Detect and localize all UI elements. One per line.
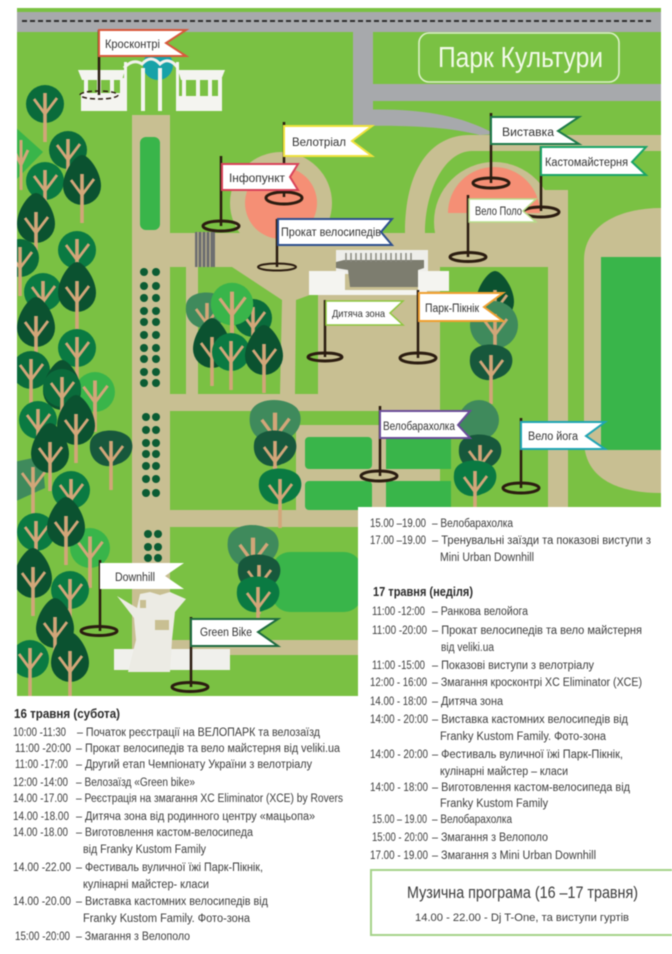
schedule: 17 May: 11:00 -15:00 — [372, 660, 425, 672]
flag: Кросконтрі — [80, 30, 186, 99]
flag: Кросконтрі: Кросконтрі — [105, 39, 160, 51]
flag: Green Bike — [172, 617, 278, 692]
schedule: 16 May: 11:00 -20:00 — [15, 743, 71, 755]
schedule: 17 May: – Змагання кросконтрі XC Eliminator (XCE) — [432, 677, 642, 689]
stairs — [195, 232, 215, 267]
flag: Велотріал — [266, 122, 372, 204]
tree cluster: central park — [186, 283, 283, 393]
white schedule panel — [358, 507, 672, 954]
schedule: 17 May: – Виготовлення кастом-велосипеда від — [432, 782, 630, 794]
schedule: 17 May: – Фестиваль вуличної їжі Парк-Пікнік, — [432, 749, 623, 761]
schedule: 16 May continued — [370, 518, 651, 564]
flag: Велобарахолка — [361, 406, 470, 481]
flag: Кастомайстерня: Кастомайстерня — [545, 157, 628, 169]
schedule: 17 May: – Змагання з Велополо — [432, 832, 548, 844]
tree cluster: east of plaza — [470, 271, 518, 404]
salmon flower beds — [245, 167, 540, 239]
schedule: 17 May: від veliki.ua — [441, 642, 495, 654]
schedule: 17 May: 14:00 - 20:00 — [370, 714, 428, 726]
music programme box: 14.00 - 22.00 - Dj T-One, та виступи гуртів — [415, 912, 629, 924]
schedule: 16 May: – Велозаїзд «Green bike» — [76, 777, 195, 789]
schedule: 17 May: 11:00 -12:00 — [372, 606, 425, 618]
heading: 17 травня (неділя): 17 травня (неділя) — [373, 584, 473, 599]
flag: Парк-Пікнік — [400, 290, 503, 363]
flag: Дитяча зона — [308, 300, 403, 361]
schedule: 16 May: – Початок реєстрації на ВЕЛОПАРК та велозаїзд — [77, 727, 320, 739]
schedule: 17 May: – Виставка кастомних велосипедів від — [432, 714, 628, 726]
schedule: 16 May continued: Mini Urban Downhill — [440, 552, 534, 564]
schedule: 16 May: 15:00 -20:00 — [15, 931, 70, 943]
flag: Green Bike: Green Bike — [200, 627, 252, 639]
schedule: 16 May: – Дитяча зона від родинного центру «мацьопа» — [76, 811, 315, 823]
schedule: 16 May: 14.00 -17.00 — [13, 793, 68, 805]
schedule: 16 May: 10:00 -11:30 — [13, 727, 66, 739]
schedule: 17 May: 14:00 - 18:00 — [370, 782, 428, 794]
schedule: 16 May: 14.00 -18.00 — [13, 811, 69, 823]
road network — [17, 12, 661, 135]
flag: Інфопункт — [203, 156, 298, 231]
schedule: 17 May: 12:00 - 16:00 — [370, 677, 427, 689]
flag: Кастомайстерня — [523, 146, 646, 217]
schedule: 16 May: – Реєстрація на змагання XC Eliminator (XCE) by Rovers — [76, 793, 343, 805]
tree belt along left edge — [16, 84, 134, 696]
schedule: 17 May: Franky Kustom Family — [440, 798, 548, 810]
flag: Downhill: Downhill — [115, 572, 155, 584]
schedule: 17 May: – Прокат велосипедів та вело майстерня — [432, 625, 642, 637]
schedule: 16 May: 12:00 -14:00 — [13, 777, 68, 789]
map background — [17, 8, 661, 696]
flag: Парк-Пікнік: Парк-Пікнік — [425, 303, 480, 315]
schedule: 16 May: – Виготовлення кастом-велосипеда — [76, 827, 254, 839]
schedule: 16 May: 14.00 -18.00 — [13, 827, 68, 839]
central pavilion building — [309, 250, 449, 295]
flag: Вело йога: Вело йога — [528, 431, 579, 443]
schedule: 17 May: – Велобарахолка — [432, 814, 513, 826]
flag: Велотріал: Велотріал — [292, 137, 346, 149]
schedule: 17 May: 14.00 - 18:00 — [370, 696, 427, 708]
flag: Downhill — [81, 560, 184, 636]
tree cluster: middle lawn — [250, 400, 301, 528]
schedule: 16 May: Franky Kustom Family. Фото-зона — [83, 913, 251, 925]
schedule: 16 May: 14.00 -22.00 — [13, 862, 71, 874]
heading: 16 травня (субота): 16 травня (субота) — [14, 706, 120, 721]
schedule: 17 May: 14:00 - 20:00 — [370, 749, 428, 761]
schedule: 16 May: кулінарні майстер- класи — [83, 879, 209, 891]
tan paths — [132, 115, 661, 665]
schedule: 17 May: 17.00 - 19.00 — [370, 850, 428, 862]
bright lawn beds — [140, 137, 661, 612]
entrance colonnade — [78, 50, 225, 111]
tree cluster: lower lawn — [228, 525, 280, 636]
schedule: 16 May: – Прокат велосипедів та вело майстерня від veliki.ua — [76, 743, 341, 755]
flag: Вело йога — [503, 418, 605, 493]
schedule: 16 May — [13, 706, 343, 943]
flag: Інфопункт: Інфопункт — [229, 173, 286, 185]
schedule: 17 May: 11:00 -20:00 — [372, 625, 427, 637]
schedule: 16 May: від Franky Kustom Family — [83, 844, 206, 856]
schedule: 16 May: 11:00 -17:00 — [15, 759, 68, 771]
lawn patches — [170, 267, 548, 510]
schedule: 17 May: 15:00 - 20:00 — [372, 832, 428, 844]
schedule: 17 May: – Змагання з Mini Urban Downhill — [432, 850, 596, 862]
flag: Прокат велосипедів: Прокат велосипедів — [281, 227, 381, 239]
schedule: 16 May continued: – Тренувальні заїзди та показові виступи з — [432, 535, 651, 547]
schedule: 17 May: Franky Kustom Family. Фото-зона — [440, 731, 607, 743]
schedule: 16 May continued: 17.00 –19.00 — [370, 535, 426, 547]
schedule: 17 May: – Дитяча зона — [432, 696, 504, 708]
war memorial statue — [114, 592, 230, 672]
schedule: 17 May: – Ранкова велойога — [432, 606, 529, 618]
schedule: 16 May: – Змагання з Велополо — [76, 931, 190, 943]
schedule: 16 May: – Другий етап Чемпіонату України з велотріалу — [76, 759, 312, 771]
tree cluster: east lawn — [454, 400, 501, 520]
schedule: 16 May continued: – Велобарахолка — [432, 518, 514, 530]
hedge dots — [140, 268, 162, 562]
flag: Вело Поло: Вело Поло — [475, 206, 522, 218]
flag: Дитяча зона: Дитяча зона — [332, 308, 385, 320]
title plate: Парк Культури: Парк Культури — [438, 42, 603, 74]
flag: Прокат велосипедів — [258, 219, 392, 270]
flag: Виставка: Виставка — [502, 127, 555, 139]
schedule: 17 May: кулінарні майстер – класи — [440, 766, 568, 778]
flag: Вело Поло — [450, 195, 536, 262]
flag: Велобарахолка: Велобарахолка — [383, 421, 456, 433]
schedule: 17 May: – Показові виступи з велотріалу — [432, 660, 594, 672]
schedule: 16 May: 14.00 -20.00 — [13, 896, 71, 908]
schedule: 16 May continued: 15.00 –19.00 — [370, 518, 426, 530]
schedule: 17 May: 15.00 – 19.00 — [372, 814, 427, 826]
music programme box — [371, 870, 672, 935]
flag: Виставка — [473, 113, 579, 188]
schedule: 17 May — [370, 584, 642, 862]
schedule: 16 May: – Виставка кастомних велосипедів від — [76, 896, 268, 908]
schedule: 16 May: – Фестиваль вуличної їжі Парк-Пікнік, — [76, 862, 263, 874]
title plate: Парк Культури — [419, 33, 619, 82]
